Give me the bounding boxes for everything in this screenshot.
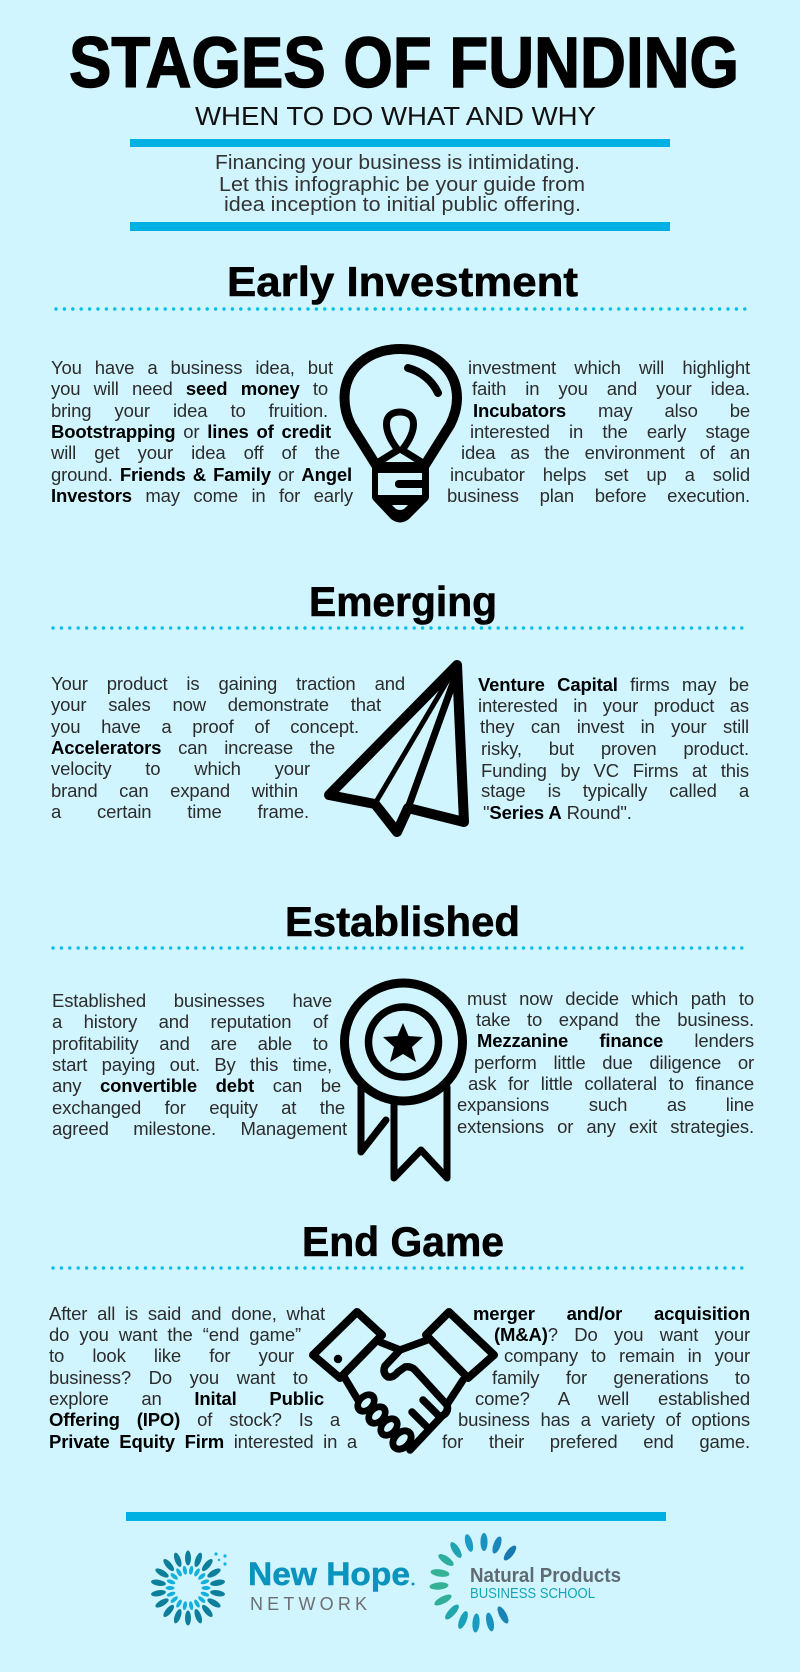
text: emerging right xyxy=(478,674,750,823)
text: early investment left: Bootstrapping or lines of credit xyxy=(51,421,331,442)
panel: emerging xyxy=(51,578,750,837)
text: established left: exchanged for equity at the xyxy=(52,1097,345,1118)
text: established right: ask for little collateral to finance xyxy=(468,1073,754,1094)
text: emerging right: Funding by VC Firms at this xyxy=(481,760,749,781)
lower bar xyxy=(130,222,670,231)
icon: handshake xyxy=(313,1312,494,1458)
intro text: Financing your business is intimidating. xyxy=(215,152,580,174)
text: established left: Established businesses have xyxy=(52,990,332,1011)
text: end game left: After all is said and done, what xyxy=(49,1303,325,1324)
text: end game left: explore an Inital Public xyxy=(49,1388,324,1409)
text: end game left: to look like for your xyxy=(49,1345,294,1366)
logo text: natural products business school xyxy=(470,1565,621,1602)
text: end game right: come? A well established xyxy=(475,1388,750,1409)
text: end game right: for their prefered end game. xyxy=(442,1431,750,1452)
text: established right: perform little due diligence or xyxy=(474,1052,754,1073)
logo text: new hope network: NETWORK xyxy=(250,1594,367,1614)
text: emerging left: you have a proof of concept. xyxy=(51,716,359,737)
footer panel xyxy=(126,1512,666,1632)
text: early investment right: idea as the environment of an xyxy=(461,442,750,463)
text: emerging left: brand can expand within xyxy=(51,780,298,801)
logo text: natural products business school: Natural Products xyxy=(470,1565,621,1587)
text: early investment left: Investors may come in for early xyxy=(51,485,353,506)
text: early investment left: ground. Friends & Family or Angel xyxy=(51,464,352,485)
logo text: natural products business school: BUSINESS SCHOOL xyxy=(470,1585,595,1602)
text: early investment right: business plan before execution. xyxy=(447,485,750,506)
heading: end game: End Game xyxy=(302,1218,504,1265)
text: emerging right: risky, but proven product. xyxy=(481,738,749,759)
text: end game right: company to remain in your xyxy=(504,1345,750,1366)
heading: early investment: Early Investment xyxy=(227,258,578,305)
text: emerging left: Your product is gaining traction and xyxy=(51,673,405,694)
text: emerging right: stage is typically called a xyxy=(481,780,749,801)
text: early investment left: will get your idea off of the xyxy=(51,442,340,463)
text: end game right xyxy=(442,1303,750,1452)
text: end game right: (M&A)? Do you want your xyxy=(494,1324,750,1345)
intro text: Let this infographic be your guide from xyxy=(219,174,585,196)
text: early investment left xyxy=(51,357,353,506)
text: early investment right: faith in you and your idea. xyxy=(472,378,750,399)
footer bar xyxy=(126,1512,666,1521)
top bar xyxy=(130,139,670,147)
text: emerging right: they can invest in your still xyxy=(480,716,749,737)
heading: emerging: Emerging xyxy=(309,578,497,625)
text: end game left: Offering (IPO) of stock? Is a xyxy=(49,1409,340,1430)
text: established left: any convertible debt can be xyxy=(52,1075,341,1096)
heading: established: Established xyxy=(285,898,520,945)
text: early investment right: investment which will highlight xyxy=(468,357,750,378)
icon: medal xyxy=(344,983,462,1178)
text: end game right: business has a variety of options xyxy=(458,1409,750,1430)
text: established right: Mezzanine finance lenders xyxy=(477,1030,754,1051)
text: established left: a history and reputation of xyxy=(52,1011,328,1032)
text: established left: profitability and are able to xyxy=(52,1033,328,1054)
icon: light bulb xyxy=(344,349,457,522)
text: emerging right: "Series A Round". xyxy=(483,802,632,823)
text: end game left: business? Do you want to xyxy=(49,1367,308,1388)
text: established left: start paying out. By this time, xyxy=(52,1054,332,1075)
text: early investment right: Incubators may also be xyxy=(473,400,750,421)
text: end game left: do you want the “end game” xyxy=(49,1324,301,1345)
text: established right: must now decide which path to xyxy=(467,988,754,1009)
text: established right xyxy=(457,988,754,1137)
logo text: new hope network: New Hope xyxy=(248,1556,410,1592)
logo: natural products petals xyxy=(429,1533,518,1633)
text: early investment left: bring your idea to fruition. xyxy=(51,400,328,421)
panel: early investment xyxy=(51,258,750,522)
text: emerging left: your sales now demonstrate that xyxy=(51,694,381,715)
text: early investment right: interested in the early stage xyxy=(470,421,750,442)
logo: new hope starburst xyxy=(151,1550,227,1626)
text: established left xyxy=(52,990,347,1139)
icon: paper plane xyxy=(329,665,464,832)
text: early investment left: You have a business idea, but xyxy=(51,357,333,378)
text: end game left xyxy=(49,1303,358,1452)
logo text: new hope network xyxy=(248,1556,414,1614)
header panel xyxy=(69,24,739,231)
title: STAGES OF FUNDING xyxy=(69,24,739,103)
text: emerging left xyxy=(51,673,405,822)
panel: end game xyxy=(49,1218,750,1454)
subtitle: WHEN TO DO WHAT AND WHY xyxy=(195,101,596,131)
text: established left: agreed milestone. Management xyxy=(52,1118,347,1139)
text: end game right: merger and/or acquisition xyxy=(473,1303,750,1324)
text: emerging left: a certain time frame. xyxy=(51,801,309,822)
text: established right: expansions such as line xyxy=(457,1094,754,1115)
text: established right: take to expand the business. xyxy=(476,1009,754,1030)
text: emerging right: interested in your product as xyxy=(478,695,749,716)
intro text xyxy=(215,152,585,216)
panel: established xyxy=(51,898,754,1182)
text: early investment right xyxy=(447,357,750,506)
text: early investment left: you will need seed money to xyxy=(51,378,328,399)
text: end game right: family for generations to xyxy=(492,1367,750,1388)
text: end game left: Private Equity Firm interested in a xyxy=(49,1431,357,1452)
text: established right: extensions or any exit strategies. xyxy=(457,1116,754,1137)
intro text: idea inception to initial public offering. xyxy=(224,194,581,216)
text: emerging left: Accelerators can increase the xyxy=(51,737,335,758)
text: emerging right: Venture Capital firms may be xyxy=(478,674,749,695)
text: early investment right: incubator helps set up a solid xyxy=(450,464,750,485)
text: emerging left: velocity to which your xyxy=(51,758,310,779)
